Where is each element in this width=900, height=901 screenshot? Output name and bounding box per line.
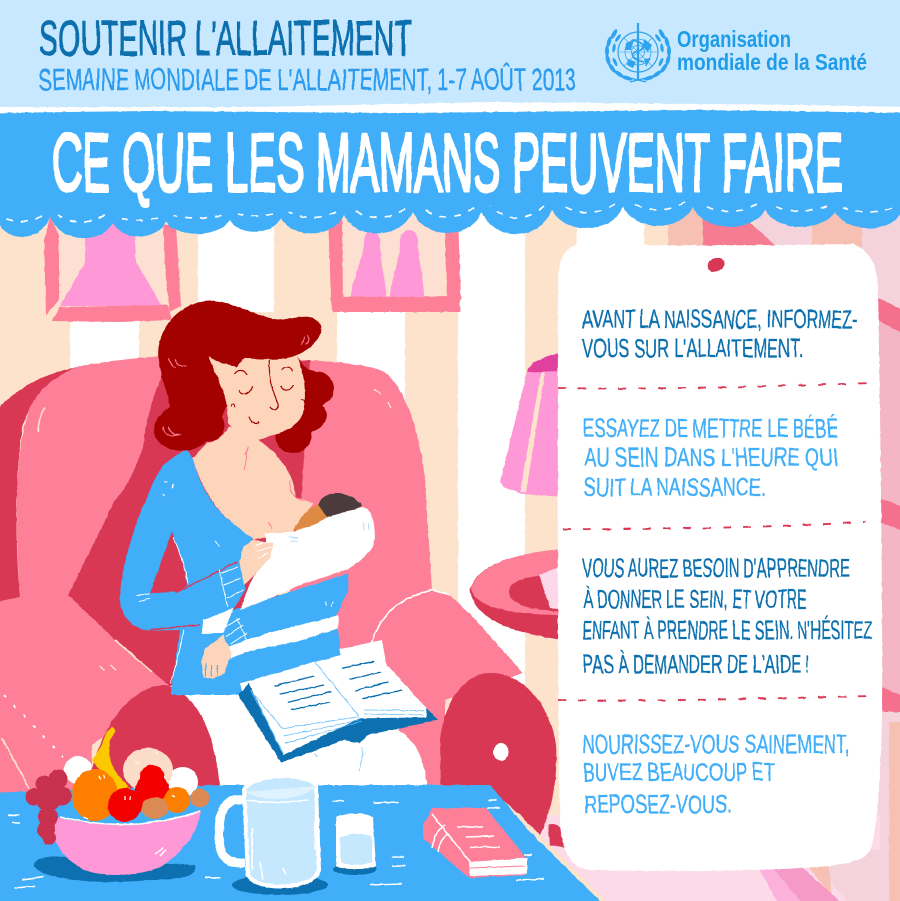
advice 3	[582, 553, 872, 679]
blue banner background	[0, 100, 900, 238]
laurel wreath	[605, 28, 671, 82]
facial features	[233, 343, 294, 423]
arm gap	[150, 532, 187, 593]
small orange	[164, 787, 190, 813]
page heading	[39, 12, 843, 209]
white ribbon strip	[0, 102, 900, 113]
room wall stripes	[0, 200, 900, 901]
baby wrap	[240, 507, 375, 610]
table highlights	[8, 800, 544, 888]
jug shadow	[232, 875, 328, 895]
grapes	[26, 770, 72, 845]
front arm right	[440, 673, 556, 835]
chair piping lines	[370, 590, 450, 650]
advice 2: SUIT LA NAISSANCE.	[584, 472, 766, 502]
fruit bowl	[26, 726, 210, 882]
dashed divider 3	[558, 696, 872, 701]
card text	[582, 304, 872, 819]
bowl body	[44, 810, 201, 875]
hair highlights	[163, 335, 309, 436]
jug handle	[219, 800, 245, 863]
baby hair	[318, 493, 362, 517]
neck and chest	[193, 427, 313, 540]
lower hand	[202, 635, 232, 679]
glass of water	[333, 814, 377, 875]
chair outer shadow	[0, 367, 78, 604]
logo text	[677, 26, 867, 75]
mother nursing baby	[120, 301, 375, 695]
front arm left	[88, 685, 220, 795]
advice 2	[583, 413, 838, 502]
card background	[558, 243, 882, 871]
chair back shadow	[68, 360, 310, 720]
face	[208, 355, 305, 440]
chair back left and arm	[0, 355, 172, 800]
lamp	[500, 352, 565, 497]
brown fruits	[142, 797, 168, 819]
staff and serpent	[637, 23, 639, 80]
chair button	[494, 743, 508, 761]
jug body	[244, 776, 319, 886]
upper hand	[239, 540, 273, 585]
fruit highlights	[84, 751, 175, 819]
information card	[558, 243, 882, 871]
picture frame right with two figures	[328, 215, 461, 312]
subtitle: SEMAINE MONDIALE DE L'ALLAITEMENT, 1-7 AOÛT 2013	[39, 62, 576, 97]
title: SOUTENIR L'ALLAITEMENT	[39, 12, 412, 66]
scallop stitching	[4, 202, 892, 222]
advice 4: BUVEZ BEAUCOUP ET	[583, 757, 775, 787]
red apples	[140, 765, 164, 789]
table	[0, 785, 620, 901]
closed pink book	[423, 808, 527, 878]
white seat and legs	[170, 640, 427, 790]
advice 4	[582, 729, 850, 819]
side table	[470, 549, 565, 700]
advice 1	[582, 304, 858, 363]
WHO emblem	[605, 23, 671, 82]
peach	[123, 748, 173, 792]
continents	[625, 39, 652, 68]
header background	[0, 0, 900, 108]
orange	[72, 769, 118, 821]
dashed divider 1	[558, 383, 872, 389]
floor	[520, 815, 889, 901]
picture frame left	[44, 215, 181, 322]
hair	[154, 301, 334, 453]
armchair	[0, 355, 556, 835]
baby face	[293, 503, 330, 533]
chair back right and arm	[290, 360, 523, 790]
globe rings	[618, 32, 658, 72]
organisation name line 2: mondiale de la Santé	[677, 49, 867, 75]
open book	[238, 652, 438, 771]
advice 4: REPOSEZ-VOUS.	[584, 789, 732, 819]
banana	[92, 726, 131, 792]
dashed divider 2	[563, 522, 866, 529]
bowl shadow	[34, 857, 195, 882]
sweater	[120, 450, 348, 695]
organisation name line 1: Organisation	[677, 26, 791, 52]
card pin	[708, 258, 724, 272]
water jug	[219, 776, 328, 895]
sweater details	[137, 482, 333, 683]
white fruit	[64, 756, 92, 784]
